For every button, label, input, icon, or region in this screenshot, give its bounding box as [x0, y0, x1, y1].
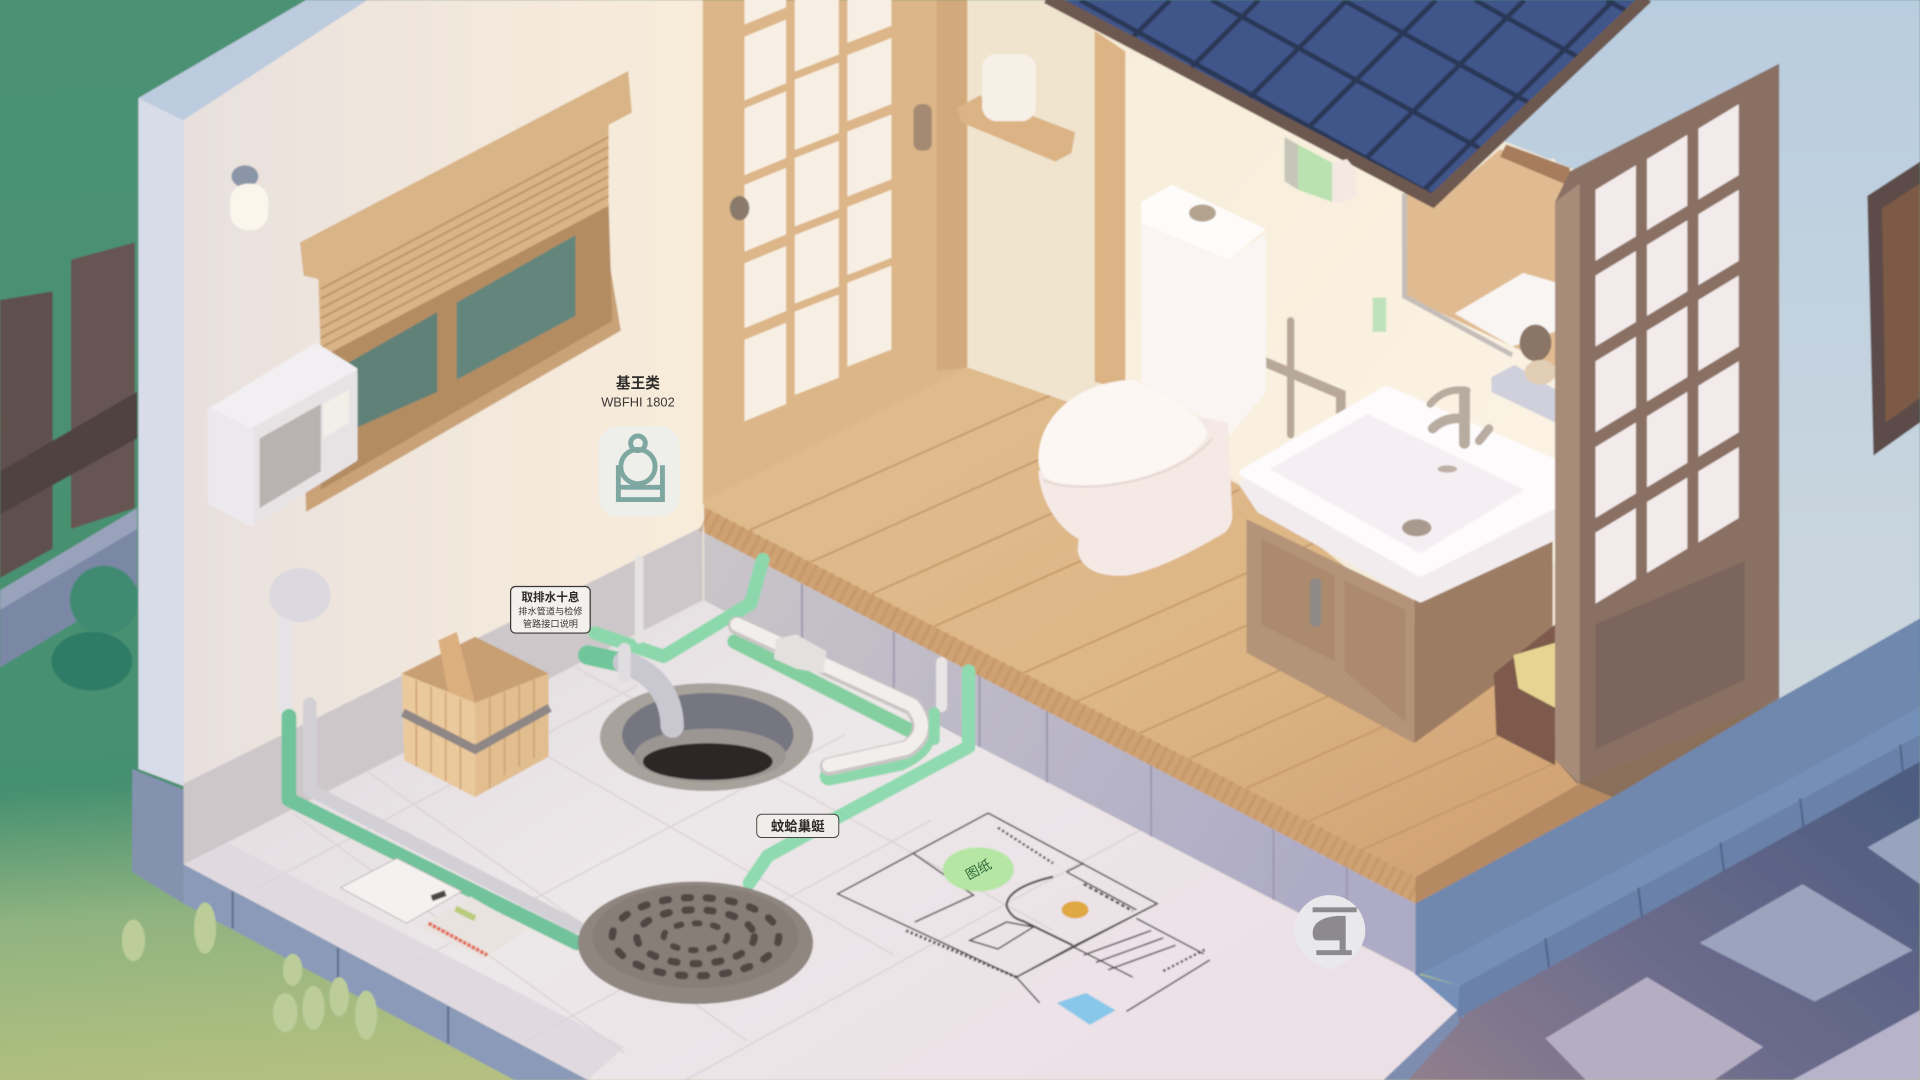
callout: box with small text: 管路接口说明 — [523, 618, 578, 629]
panel: right door — [1555, 64, 1779, 784]
icon: pipe cap — [269, 568, 331, 622]
panel: house foundation right — [1414, 618, 1920, 977]
callout: box with small text — [511, 587, 590, 633]
label: top heading with icon card: WBFHI 1802 — [601, 395, 675, 410]
icon: pipe collar — [774, 634, 827, 673]
panel: toilet — [1038, 185, 1266, 576]
panel: front curb — [184, 864, 588, 1080]
base fill behind house — [184, 0, 1580, 973]
panel: left wall base — [132, 769, 184, 904]
panel: right exterior wall — [1500, 0, 1920, 710]
icon: map pin with faucet glyph — [1294, 895, 1365, 970]
panel: wash basin — [1243, 389, 1555, 599]
panel: left door — [703, 0, 967, 504]
icon: wall lamp — [230, 165, 268, 230]
icon: items on small shelf — [1491, 324, 1556, 422]
panel: inner back walls — [967, 0, 1555, 563]
window on far right — [1867, 162, 1920, 456]
icon: wall switch — [1373, 298, 1386, 332]
panel: wooden shelf with tissue roll — [958, 54, 1075, 162]
panel: manhole cover — [578, 882, 813, 1004]
panel: left wall — [138, 0, 703, 864]
panel: vanity cabinet — [1247, 519, 1555, 765]
icon: green wall dispenser — [1284, 137, 1357, 203]
icon: meter box — [211, 345, 355, 524]
panel: open drain hole — [600, 683, 813, 791]
panel: wooden floor — [703, 367, 1668, 973]
panel: green and grey pipes — [285, 560, 969, 943]
callout: box with small text: 取排水十息 — [521, 590, 580, 604]
label: top heading with icon card: 基王类 — [616, 374, 660, 392]
panel: blueprint on floor — [838, 813, 1210, 1025]
panel: road and stepping stones — [1384, 735, 1920, 1080]
panel: wooden window with shutter — [300, 71, 632, 512]
panel: curb stones — [1414, 707, 1920, 1019]
callout: pipe label: 蚊蛤巢蜓 — [771, 818, 825, 834]
label: blueprint green dot text: 图纸 — [963, 857, 994, 883]
label: top heading with icon card — [599, 374, 680, 517]
icon: grass tufts — [122, 902, 377, 1040]
panel: basket with paddle — [402, 632, 550, 797]
callout: pipe label — [757, 814, 839, 838]
icon: grab bar — [1260, 321, 1341, 435]
panel: papers on floor — [340, 858, 528, 959]
panel: mirror — [1404, 144, 1570, 367]
panel: stone floor — [184, 600, 1460, 1080]
panel: roof — [1044, 0, 1652, 209]
background: fence and stone wall — [0, 242, 138, 691]
callout: box with small text: 排水管道与检修 — [518, 606, 583, 617]
icon: elbow pipe — [588, 649, 672, 726]
icon: faucet — [1430, 390, 1489, 443]
